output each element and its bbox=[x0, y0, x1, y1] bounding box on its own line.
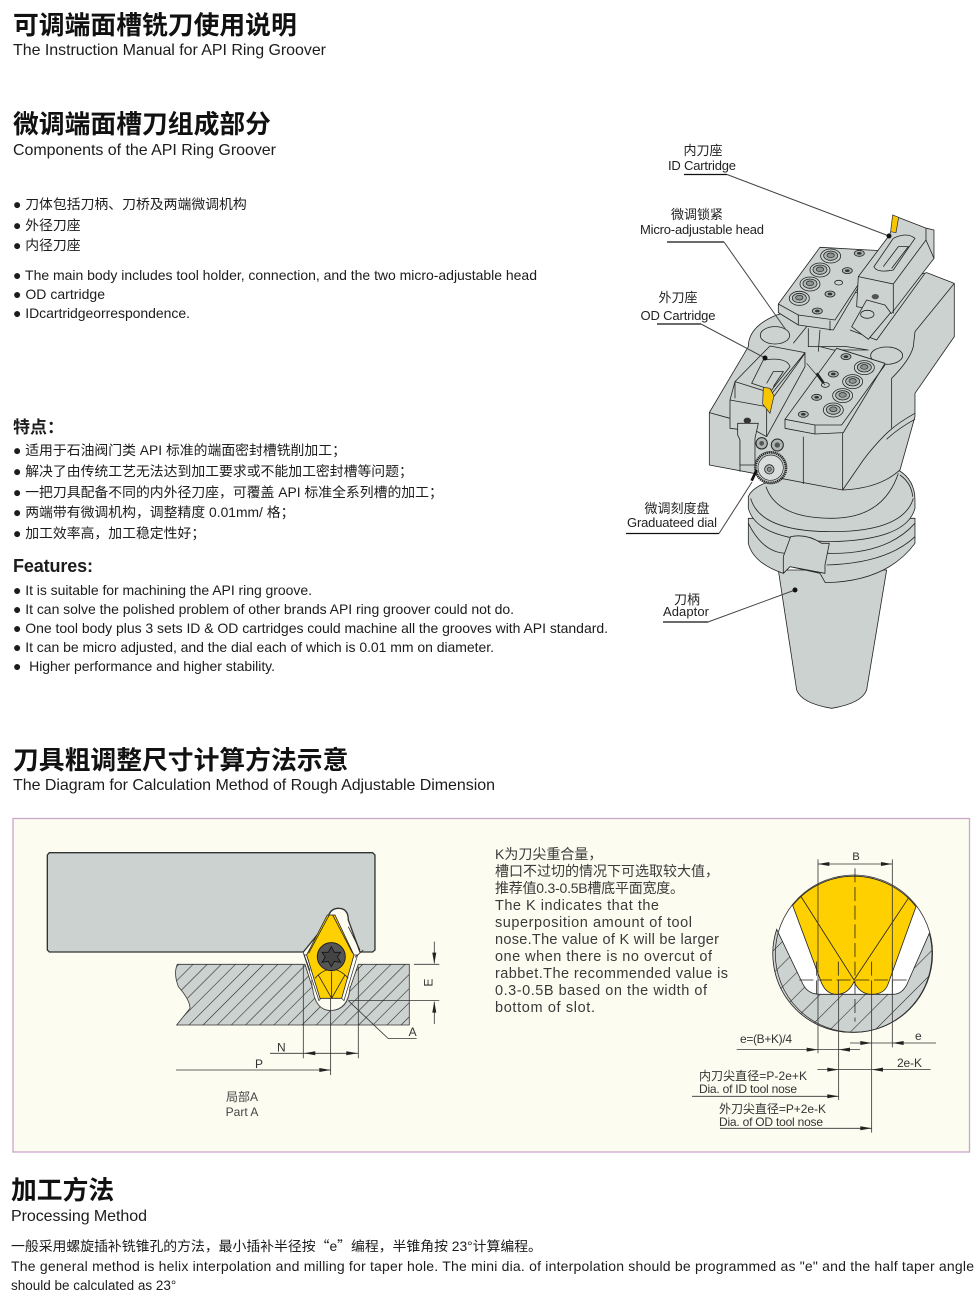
title: The Instruction Manual for API Ring Groover bbox=[13, 42, 327, 59]
text block: K description bbox=[495, 846, 728, 1016]
callout: ID cartridge: 内刀座 bbox=[683, 143, 723, 158]
text block: features Chinese bbox=[13, 442, 443, 542]
dimension labels: 外刀尖直径=P+2e-K bbox=[719, 1102, 826, 1116]
callout: adaptor: 刀柄 bbox=[674, 592, 700, 607]
hatched workpiece bbox=[176, 964, 409, 1025]
heading: rough adjustment diagram: 刀具粗调整尺寸计算方法示意 bbox=[13, 746, 348, 775]
callout: graduated dial: Graduateed dial bbox=[627, 515, 717, 530]
yellow insert bbox=[307, 915, 354, 998]
illustration: API ring groover tool bbox=[709, 215, 954, 708]
heading: rough adjustment diagram bbox=[13, 746, 495, 794]
callout: OD cartridge: OD Cartridge bbox=[640, 308, 716, 323]
ID cartridge bbox=[852, 215, 934, 339]
title: 可调端面槽铣刀使用说明 bbox=[13, 11, 297, 40]
text block: K description: nose.The value of K will be larger bbox=[495, 932, 719, 948]
text block: features Chinese: ● 加工效率高，加工稳定性好； bbox=[13, 525, 205, 542]
dimension lines bbox=[176, 942, 439, 1075]
text block: K description: 槽口不过切的情况下可选取较大值， bbox=[495, 863, 719, 879]
text block: processing method: should be calculated as 23° bbox=[11, 1278, 176, 1293]
gray tool block bbox=[47, 853, 375, 952]
text block: components English list: ● IDcartridgeorrespondence. bbox=[13, 305, 190, 321]
taper adaptor bbox=[778, 570, 887, 708]
dimension labels: 2e-K bbox=[897, 1056, 922, 1070]
graduated dial and adjusters bbox=[752, 438, 786, 483]
groove white gap bbox=[304, 955, 358, 1001]
text block: K description: superposition amount of tool bbox=[495, 915, 692, 931]
caption: Part A: 局部A bbox=[226, 1089, 258, 1104]
text block: features Chinese: ● 两端带有微调机构，调整精度 0.01mm/ 格； bbox=[13, 504, 294, 521]
diagram: part A tool and workpiece: E bbox=[422, 979, 436, 987]
dimension labels: Dia. of ID tool nose bbox=[699, 1082, 797, 1096]
callout: ID cartridge bbox=[668, 143, 892, 238]
dimension labels: 内刀尖直径=P-2e+K bbox=[699, 1069, 807, 1083]
text block: components Chinese list: ● 刀体包括刀柄、刀桥及两端微调机构 bbox=[13, 196, 247, 212]
text block: features English: ● It is suitable for machining the API ring groove. bbox=[13, 582, 312, 598]
title bbox=[13, 11, 327, 59]
text block: K description: K为刀尖重合量， bbox=[495, 846, 602, 862]
text block: components English list: ● The main body includes tool holder, connection, and the two micro-adjustable head bbox=[13, 267, 537, 283]
callout: micro-adjustable head bbox=[640, 207, 786, 330]
centre and dashed lines bbox=[799, 868, 910, 1022]
text block: K description: The K indicates that the bbox=[495, 898, 659, 914]
callout: graduated dial: 微调刻度盘 bbox=[644, 501, 710, 516]
heading: processing method bbox=[11, 1176, 147, 1225]
text block: K description: 推荐值0.3-0.5B槽底平面宽度。 bbox=[495, 880, 684, 896]
text block: features English: ● One tool body plus 3 sets ID & OD cartridges could machine all the grooves with API standard. bbox=[13, 620, 608, 636]
flange bbox=[748, 470, 915, 583]
callout: adaptor bbox=[663, 588, 798, 622]
text block: K description: bottom of slot. bbox=[495, 1000, 595, 1016]
dimension lines bbox=[692, 859, 936, 1133]
callout: micro-adjustable head: Micro-adjustable head bbox=[640, 222, 764, 237]
text block: K description: rabbet.The recommended value is bbox=[495, 966, 728, 982]
text block: components English list: ● OD cartridge bbox=[13, 286, 105, 302]
heading: components bbox=[13, 110, 277, 159]
callout: OD cartridge bbox=[640, 290, 768, 360]
text block: features English: ● Higher performance and higher stability. bbox=[13, 658, 275, 674]
text block: features English: ● It can be micro adjusted, and the dial each of which is 0.01 mm on diameter. bbox=[13, 639, 494, 655]
dimension labels: e=(B+K)/4 bbox=[740, 1032, 792, 1046]
micro-adjustable head, rear bbox=[778, 247, 880, 331]
tool body bbox=[709, 273, 954, 490]
callout: adaptor: Adaptor bbox=[663, 604, 710, 619]
diagram: tool nose detail bbox=[692, 851, 936, 1133]
heading: components: 微调端面槽刀组成部分 bbox=[13, 110, 271, 139]
text block: features Chinese: ● 一把刀具配备不同的内外径刀座，可覆盖 API 标准全系列槽的加工； bbox=[13, 484, 443, 501]
text block: features English bbox=[13, 582, 608, 674]
heading: processing method: Processing Method bbox=[11, 1208, 147, 1225]
text block: processing method bbox=[11, 1235, 974, 1293]
diagram: part A tool and workpiece: P bbox=[255, 1057, 263, 1071]
heading: features Chinese: 特点： bbox=[13, 418, 64, 437]
dimension labels: e bbox=[915, 1029, 922, 1043]
heading: processing method: 加工方法 bbox=[11, 1176, 114, 1205]
text block: features English: ● It can solve the polished problem of other brands API ring groover could not do. bbox=[13, 601, 514, 617]
text block: features Chinese: ● 适用于石油阀门类 API 标准的端面密封槽铣削加工； bbox=[13, 442, 346, 459]
text block: processing method: 一般采用螺旋插补铣锥孔的方法，最小插补半径按“e”编程，半锥角按 23°计算编程。 bbox=[11, 1235, 542, 1255]
text block: K description: 0.3-0.5B based on the width of bbox=[495, 983, 708, 999]
diagram: part A tool and workpiece bbox=[47, 853, 439, 1075]
caption: Part A bbox=[226, 1089, 258, 1119]
caption: Part A: Part A bbox=[226, 1105, 258, 1119]
insert screw bbox=[317, 943, 345, 971]
callout: micro-adjustable head: 微调锁紧 bbox=[671, 207, 723, 222]
diagram: tool nose detail: B bbox=[852, 851, 860, 863]
heading: components: Components of the API Ring Groover bbox=[13, 142, 277, 159]
micro-adjustable head, front bbox=[785, 348, 885, 434]
panel: diagram background bbox=[13, 818, 970, 1152]
dimension labels: Dia. of OD tool nose bbox=[719, 1115, 823, 1129]
callout: graduated dial bbox=[626, 482, 752, 534]
diagram: part A tool and workpiece: N bbox=[277, 1040, 286, 1054]
text block: components Chinese list: ● 内径刀座 bbox=[13, 237, 81, 253]
text block: components Chinese list: ● 外径刀座 bbox=[13, 217, 81, 233]
text block: processing method: The general method is helix interpolation and milling for taper hole. The mini dia. of interpolation should be programmed as "e" and the half taper angle bbox=[11, 1258, 974, 1274]
diagram: part A tool and workpiece: A bbox=[409, 1025, 417, 1039]
dimension labels bbox=[699, 1029, 922, 1129]
text block: K description: one when there is no overcut of bbox=[495, 949, 713, 965]
detail circle bbox=[775, 875, 933, 1032]
callout: ID cartridge: ID Cartridge bbox=[668, 158, 736, 173]
heading: features English: Features: bbox=[13, 556, 93, 576]
callout: OD cartridge: 外刀座 bbox=[658, 290, 698, 305]
text block: components English list bbox=[13, 267, 537, 321]
text block: components Chinese list bbox=[13, 196, 247, 253]
text block: features Chinese: ● 解决了由传统工艺无法达到加工要求或不能加工密封槽等问题； bbox=[13, 463, 413, 480]
insert pocket lines bbox=[303, 927, 363, 971]
OD cartridge bbox=[730, 346, 805, 465]
heading: rough adjustment diagram: The Diagram for Calculation Method of Rough Adjustable Dimension bbox=[13, 777, 495, 794]
